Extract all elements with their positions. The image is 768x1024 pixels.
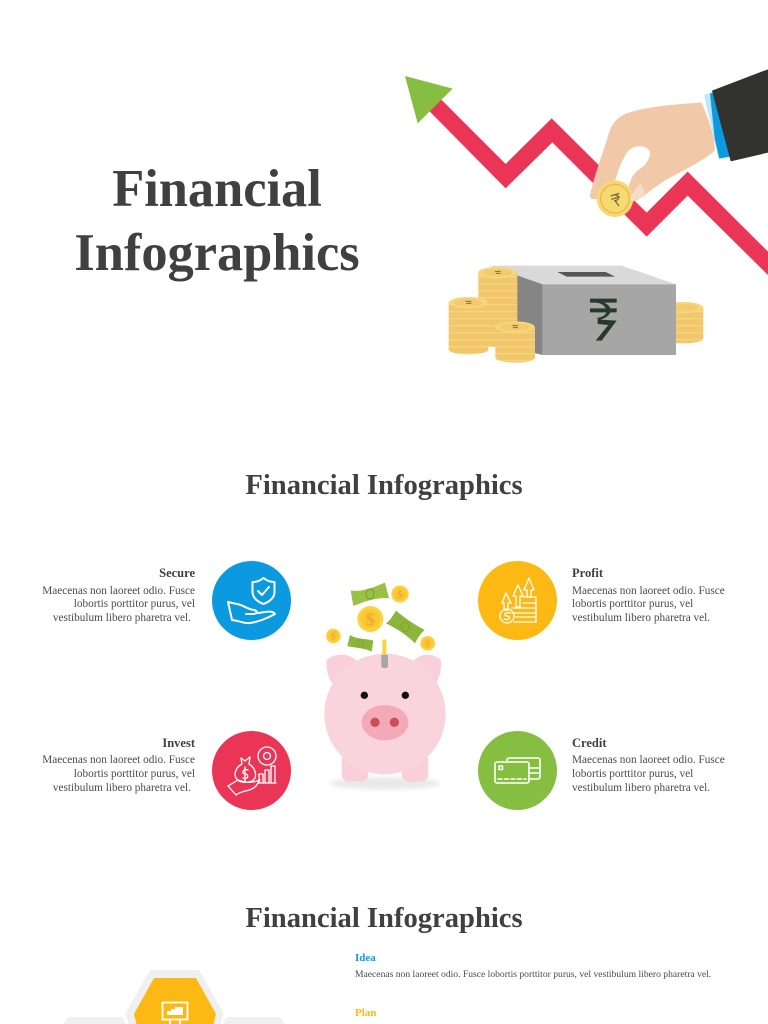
text block: Secure: lobortis porttitor purus, vel [74,598,195,610]
box front [543,284,676,355]
section heading: middle: Financial Infographics [245,470,523,501]
text block: Profit: Maecenas non laoreet odio. Fusce [572,585,725,597]
side hexagon right [219,1017,288,1024]
text block: Profit [572,566,725,624]
coins: $ [397,589,403,601]
text block: Invest: Invest [162,736,196,750]
text block: Secure: vestibulum libero pharetra vel. [53,612,191,624]
hand [590,103,715,202]
box slot [557,272,615,277]
centre hexagon outer [125,970,224,1024]
text block: Profit: vestibulum libero pharetra vel. [572,612,710,624]
text block: Credit: lobortis porttitor purus, vel [572,768,693,780]
eyes [361,692,409,699]
thumb tip [630,183,645,200]
title: Infographics [74,224,360,282]
text block: Secure [42,566,195,624]
slot [381,655,388,668]
text block: Idea: Idea [355,952,376,964]
text block: Invest [42,736,196,794]
text block: Profit: lobortis porttitor purus, vel [572,598,693,610]
falling coin in slot [382,639,386,658]
shirt cuff [704,93,728,158]
text block: Invest: lobortis porttitor purus, vel [74,768,195,780]
centre hexagon [134,978,216,1024]
text block: Credit [572,736,725,794]
arrow head [405,76,453,123]
coin stack behind box [663,302,703,343]
icon: credit cards [478,731,557,810]
text block: Secure: Maecenas non laoreet odio. Fusce [42,585,195,597]
text block: Idea: Maecenas non laoreet odio. Fusce lobortis porttitor purus, vel vestibulum libero pharetra vel. [355,969,711,980]
icon: invest, money bag and chart [212,731,291,810]
icon: profit, coins and arrows [478,561,557,640]
coin [597,180,633,217]
box side [507,272,543,355]
rupee symbol [590,299,617,341]
side hexagon left [60,1017,130,1024]
coins: $ [366,609,375,629]
coin stack front [495,321,535,363]
hexagon diagram [60,970,288,1024]
feet [342,753,368,782]
zigzag line [422,92,768,275]
blue cuff [710,93,730,159]
coins: $ [425,639,430,650]
bills [347,583,425,652]
text block: Invest: vestibulum libero pharetra vel. [53,782,191,794]
coins [326,585,435,651]
text block: Credit: vestibulum libero pharetra vel. [572,782,710,794]
sleeve [712,69,768,161]
illustration: red zigzag arrow with hand and coin [405,69,768,275]
snout [362,705,408,740]
section heading: bottom: Financial Infographics [245,903,523,934]
text block: Secure: Secure [159,566,195,580]
box top [488,266,676,284]
text block: Credit: Maecenas non laoreet odio. Fusce [572,754,725,766]
coin stack back [478,267,517,347]
text block: Plan: Plan [355,1007,376,1019]
text block: Credit: Credit [572,736,607,750]
icon: secure, shield over hand [212,561,291,640]
title [74,160,360,282]
coins: $ [331,631,336,642]
text block: Profit: Profit [572,566,604,580]
text block: Invest: Maecenas non laoreet odio. Fusce [42,754,195,766]
ears [327,655,360,685]
body [324,654,446,774]
illustration: rupee box and coin stacks [449,266,703,363]
icon: presentation board [162,1002,188,1024]
coin stack left [449,297,488,354]
illustration: piggy bank with falling money [324,583,446,789]
shadow [330,777,440,789]
title: Financial [112,160,322,218]
text block: Idea [355,952,711,980]
